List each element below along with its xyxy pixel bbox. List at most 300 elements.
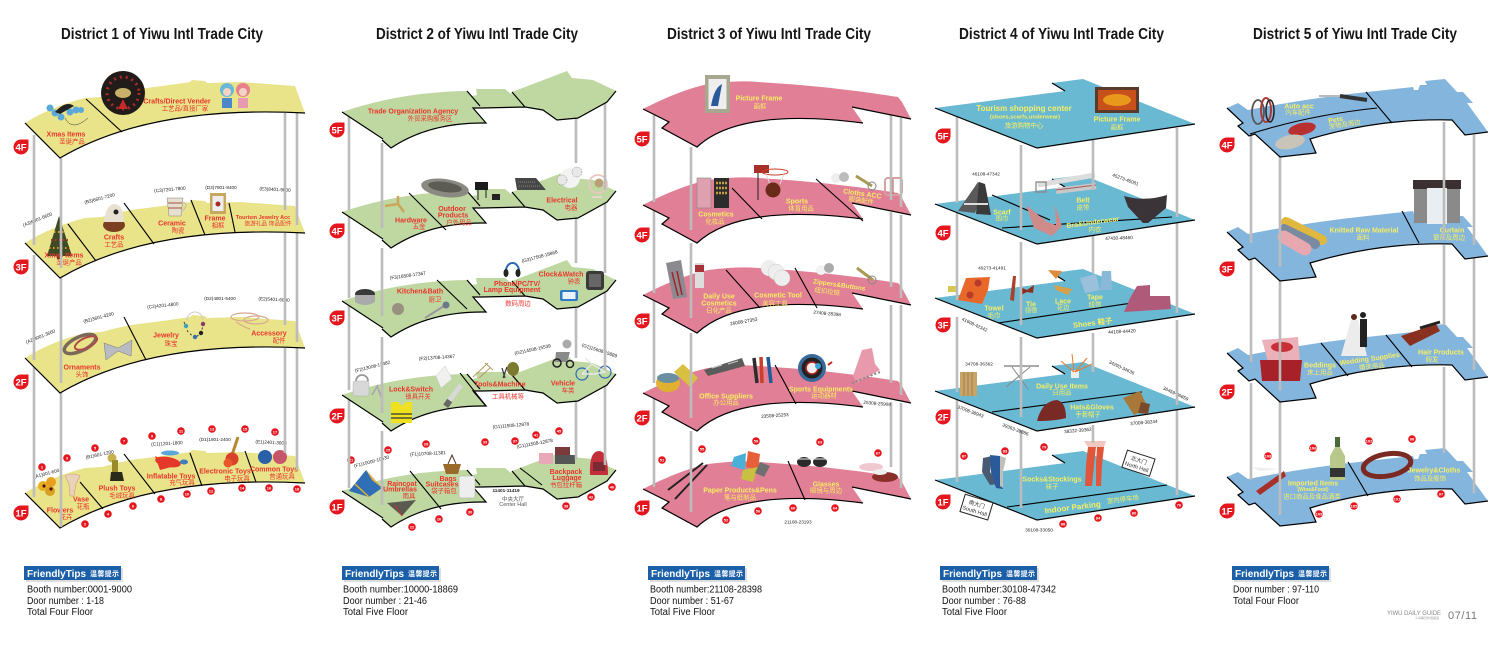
icon: colourful brushes	[1061, 354, 1092, 378]
sign: North Hall: North Hall	[1124, 461, 1149, 474]
booth numbers 3F	[390, 249, 559, 281]
friendly tips: District 1: Booth number:0001-9000	[27, 584, 132, 596]
door numbers 1-18: 1	[41, 464, 44, 470]
label: Towel: Towel	[984, 306, 1004, 312]
label: Cosmetic Tool: Cosmetic Tool	[754, 292, 802, 300]
label: Tourism shopping center: 旅游购物中心	[1005, 120, 1044, 130]
poles 2F to 1F	[349, 380, 605, 505]
label: Auto acc: 汽车配件	[1285, 108, 1311, 116]
label: Bra&Underwear: Bra&Underwear	[1066, 216, 1120, 230]
door numbers 97-108: 97	[1439, 492, 1444, 496]
poles 5F to 4F	[957, 117, 1177, 230]
icon: buttons	[816, 263, 834, 275]
icon: alarm clock	[560, 290, 578, 301]
label: Frame: 相框	[212, 220, 225, 230]
label: Vehicle: 车类	[562, 386, 575, 394]
door numbers 97-108: 102	[1366, 438, 1373, 444]
label: Picture Frame	[1094, 116, 1140, 132]
icon: socks	[982, 455, 1006, 489]
label: Electrical: Electrical	[546, 198, 578, 204]
icon: accessory	[231, 313, 268, 329]
badge 3F	[14, 260, 28, 274]
label: Beddings: Beddings	[1304, 362, 1336, 370]
friendly tips: District 1: FriendlyTips	[27, 568, 86, 580]
floor 3F	[1220, 180, 1488, 281]
label: Sports Equipments: Sports Equipments	[789, 386, 853, 394]
label: Curtain	[1433, 228, 1466, 242]
label: Raincoat Umbrellas: Umbrellas	[383, 486, 417, 494]
door numbers 51-67: 56	[756, 508, 761, 514]
sign: South Hall: 南大门	[968, 498, 986, 510]
badge 4F: 4F	[15, 142, 27, 154]
label: Picture Frame	[736, 96, 782, 110]
badge 3F	[634, 314, 650, 328]
label: Scarf: 围巾	[996, 214, 1008, 222]
icon: ornaments	[62, 330, 99, 358]
badge 3F	[330, 310, 344, 326]
footer: Yiwu Daily Guide page number	[1387, 610, 1477, 622]
badge 2F: 2F	[937, 412, 949, 424]
label: Office Suppliers: 办公用品	[713, 398, 739, 406]
label: Glasses	[810, 482, 843, 494]
label: Glasses: Glasses	[813, 482, 840, 488]
label: Center Hall: 11401-11419	[492, 488, 520, 493]
door numbers 1-18: 4	[107, 512, 110, 516]
label: Electrical: 电器	[565, 202, 578, 212]
label: Tools&Machine	[474, 382, 526, 400]
icon: suitcase	[459, 476, 475, 498]
door numbers 1-18: 5	[94, 446, 97, 450]
label: Pets: Pets	[1328, 116, 1344, 125]
label: Lace	[1055, 298, 1071, 312]
booth numbers 3F: (E3)8401-9000	[259, 186, 291, 193]
icon: xmas wreath	[101, 71, 145, 115]
label: Ceramic: Ceramic	[158, 220, 186, 228]
booth numbers 2F: 34708-36362	[965, 362, 993, 366]
label: Cosmetics	[698, 212, 734, 226]
icon: bird basket	[103, 204, 125, 232]
label: Hats&Gloves: Hats&Gloves	[1070, 404, 1114, 412]
label: Vase: Vase	[73, 496, 89, 504]
label: Crafts/Direct Vender: Crafts/Direct Vender	[143, 98, 211, 106]
door numbers 51-67: 60	[791, 506, 796, 510]
label: Xmas Items 4F	[47, 132, 86, 146]
floor 3F	[634, 260, 911, 333]
badge 1F: 1F	[15, 508, 27, 520]
friendly tips: District 1: 温馨提示	[90, 569, 119, 578]
label: Glasses: 眼镜与周边	[810, 486, 843, 494]
badge 5F	[634, 132, 650, 146]
label: Imported Items: (Wine&Food)	[1297, 487, 1329, 493]
label: Picture Frame: 画框	[1111, 122, 1124, 132]
booth numbers 2F: (C2)4201-4800	[147, 301, 179, 310]
icon: makeup palettes	[697, 178, 729, 208]
badge 2F	[14, 374, 28, 390]
door numbers 97-108: 98	[1410, 436, 1415, 442]
friendly tips: District 4: Booth number:30108-47342	[942, 584, 1056, 596]
floor 2F	[330, 340, 618, 431]
icon: piano	[475, 182, 500, 200]
friendly tips: District 3	[648, 566, 762, 618]
friendly tips: District 2: 温馨提示	[408, 569, 437, 578]
booth numbers 3F: 40273-41491	[978, 266, 1006, 270]
label: Hair Products: 假发	[1426, 354, 1439, 364]
badge 5F: 5F	[636, 134, 648, 146]
door numbers 51-67: 63	[818, 440, 823, 444]
label: Office Suppliers	[699, 394, 753, 406]
booth numbers 2F: 36459-36859	[1162, 386, 1190, 402]
friendly tips: District 4: Door number : 76-88	[942, 596, 1026, 607]
door numbers 21-46: 22	[410, 524, 415, 530]
label: Sports: Sports	[786, 198, 808, 206]
label: Bags Suitcases: 袋子箱包	[431, 486, 457, 495]
icon: faucet	[385, 196, 404, 212]
label: Tie	[1025, 302, 1038, 314]
icon: coloured paper sheets	[731, 451, 770, 482]
label: Xmas Items 4F: Xmas Items	[47, 132, 86, 138]
panel: District 4	[935, 26, 1195, 618]
label: Crafts/Direct Vender	[143, 98, 211, 112]
door numbers 1-18: 17	[273, 430, 278, 434]
label: Jewelry: Jewelry	[153, 332, 179, 340]
label: Xmas Items 3F: 圣诞产品	[56, 258, 82, 266]
label: Hats&Gloves	[1070, 404, 1114, 418]
label: Bags Suitcases	[426, 476, 458, 495]
label: Xmas Items 4F: 圣诞产品	[59, 136, 85, 146]
icon: glasses cases	[859, 463, 898, 482]
label: Jewelry	[153, 332, 179, 348]
booth numbers 3F: (B3)6601-7200	[84, 192, 116, 205]
door numbers 1-18: 3	[66, 456, 69, 460]
label: Flowers: 花卉	[60, 512, 73, 521]
panel: District 2	[330, 26, 618, 618]
booth numbers 4F: 45273-46061	[1112, 173, 1140, 187]
booth numbers 2F: (D2)4801-5400	[204, 296, 236, 301]
poles 4F to 3F	[34, 113, 297, 268]
label: Lock&Switch: Lock&Switch	[389, 386, 433, 394]
badge 2F	[634, 410, 650, 426]
poles 4F to 3F	[1251, 122, 1474, 267]
friendly tips: District 3: 温馨提示	[714, 569, 743, 578]
door numbers 97-108	[1264, 435, 1445, 518]
label: Lock&Switch: 锁具开关	[405, 392, 431, 400]
friendly tips: District 2	[342, 566, 458, 618]
badge 3F: 3F	[937, 320, 949, 332]
label: Electronic Toys: Electronic Toys	[199, 468, 251, 476]
icon: plush giraffe	[108, 454, 124, 481]
friendly tips: District 2: Door number : 21-46	[343, 596, 427, 607]
icon: pens	[668, 463, 707, 499]
icon: picture frame	[210, 193, 226, 214]
badge 2F: 2F	[331, 412, 343, 422]
poles 3F to 2F	[957, 317, 1177, 417]
badge 4F	[1220, 138, 1234, 152]
label: Bra&Underwear: 内衣	[1089, 224, 1102, 234]
footer: Yiwu Daily Guide page number: YIWU DAILY GUIDE	[1387, 611, 1441, 617]
icon: mixer console	[515, 178, 546, 190]
icon: tricycle	[553, 340, 574, 368]
booth numbers 3F	[961, 266, 1136, 335]
icon: hand tools	[473, 363, 493, 378]
badge 1F	[634, 500, 650, 516]
label: Hats&Gloves: 手套帽子	[1075, 410, 1101, 418]
floor 4F	[935, 172, 1195, 244]
floor 4F	[330, 167, 616, 248]
label: Lace: Lace	[1055, 298, 1071, 306]
badge 5F	[936, 128, 950, 144]
icon: basketball hoop	[754, 165, 788, 200]
title: District 5: District 5 of Yiwu Intl Trade City	[1253, 26, 1457, 43]
icon: machine parts	[502, 362, 519, 378]
icon: cotton pads	[761, 260, 790, 286]
icon: common toy balls	[258, 450, 287, 464]
door numbers 51-67: 64	[833, 506, 838, 510]
friendly tips: District 1	[24, 566, 132, 618]
floor 5F	[935, 79, 1195, 148]
booth numbers 3F	[22, 185, 291, 228]
booth numbers 1F: (F1)10000-10630	[353, 454, 390, 469]
icon: wooden blocks	[960, 372, 977, 396]
door numbers 21-46: 21	[349, 458, 354, 462]
icon: framed carpet picture	[1095, 87, 1139, 113]
label: Plush Toys: 毛绒玩具	[109, 490, 135, 500]
badge 4F	[14, 140, 28, 154]
poles 3F to 2F	[1251, 245, 1474, 391]
floor 4F	[14, 71, 305, 158]
label: Clock&Watch: Clock&Watch	[539, 272, 583, 278]
label: Phone/PC/TV: Phone/PC/TV/	[494, 281, 540, 288]
booth numbers 2F: (F2)13708-14367	[419, 354, 456, 361]
label: Knitted Raw Material: Knitted Raw Material	[1330, 228, 1398, 234]
label: Xmas Items 3F	[45, 252, 84, 266]
label: Socks&Stockings: Socks&Stockings	[1022, 476, 1082, 484]
badge 1F: 1F	[331, 502, 343, 514]
poles 2F to 1F	[1251, 367, 1474, 515]
poles 3F to 2F	[34, 233, 297, 383]
icon: backpack	[590, 451, 608, 475]
label: Daily Use Items	[1036, 384, 1088, 396]
label: Socks&Stockings	[1022, 476, 1082, 490]
label: Lock&Switch	[389, 386, 433, 400]
label: Lace: 花边	[1057, 302, 1070, 312]
friendly tips: District 3: Booth number:21108-28398	[650, 584, 762, 596]
panel: District 5	[1220, 26, 1488, 607]
label: Jewelry&Cloths	[1408, 468, 1460, 482]
label: Common Toys	[250, 466, 298, 480]
badge 3F: 3F	[1221, 264, 1233, 276]
label: Tools&Machine: Tools&Machine	[474, 382, 526, 388]
label: Tape: 线带	[1089, 300, 1102, 308]
footer: Yiwu Daily Guide page number: 07/11	[1448, 610, 1477, 622]
label: Indoor Parking: 室内停车场	[1106, 493, 1139, 505]
icon: chandelier	[557, 167, 582, 188]
door numbers 1-18: 12	[209, 488, 214, 494]
booth numbers 2F	[957, 360, 1190, 437]
icon: energy-saving bulb	[443, 385, 461, 408]
icon: cooking pot	[355, 289, 375, 305]
door numbers 1-18: 15	[243, 426, 248, 432]
label: Raincoat Umbrellas: Raincoat	[387, 481, 417, 488]
label: Indoor Parking	[1044, 493, 1139, 515]
icon: pocket knife	[1250, 467, 1286, 495]
floor 2F	[1220, 312, 1488, 402]
icon: safety vest	[391, 402, 412, 423]
icon: bra	[1026, 205, 1062, 236]
booth numbers 1F: 30108-33050	[1025, 528, 1053, 532]
friendly tips: District 2: FriendlyTips	[345, 568, 404, 580]
label: Imported Items	[1283, 480, 1341, 500]
friendly tips: District 2: Total Five Floor	[343, 607, 409, 618]
badge 5F	[330, 122, 344, 138]
label: Indoor Parking: Indoor Parking	[1044, 500, 1101, 515]
icon: cloth buttons	[831, 172, 849, 183]
label: Kitchen&Bath: 厨卫	[429, 296, 442, 304]
floor 1F	[1220, 435, 1488, 526]
floor 1F	[935, 441, 1195, 532]
floor 1F	[634, 437, 911, 527]
label: Crafts	[104, 234, 124, 248]
label: Jewelry: 珠宝	[165, 338, 177, 348]
label: Tie: Tie	[1026, 302, 1036, 308]
label: Paper Products&Pens: Paper Products&Pens	[703, 488, 777, 494]
floor 2F	[14, 296, 305, 393]
label: Phone/PC/TV	[484, 281, 541, 308]
label: Backpack Luggage: Backpack	[550, 469, 582, 476]
door numbers 76-88: 79	[1042, 444, 1047, 450]
label: Outdoor Products: Products	[438, 212, 468, 220]
label: Office Suppliers: Office Suppliers	[699, 394, 753, 400]
badge 1F: 1F	[636, 504, 648, 514]
icon: roller skate	[852, 348, 880, 383]
icon: wine bottle	[1330, 437, 1345, 480]
booth numbers 3F: (G3)17508-18868	[521, 249, 559, 264]
label: Crafts: Crafts	[104, 234, 124, 242]
badge 3F	[936, 318, 950, 332]
friendly tips: District 2: Booth number:10000-18869	[343, 584, 458, 596]
icon: cap	[1037, 400, 1066, 421]
label: Scarf	[993, 210, 1011, 222]
booth numbers 3F: 27408-28398	[813, 310, 841, 317]
door numbers 1-18: 13	[210, 426, 215, 432]
icon: fabric rolls	[1284, 222, 1322, 249]
badge 2F	[936, 410, 950, 424]
badge 2F: 2F	[1221, 388, 1233, 398]
booth numbers 1F	[353, 421, 554, 469]
label: Flowers: Flowers	[47, 508, 73, 514]
label: Sports Equipments	[789, 386, 853, 400]
door numbers 1-18: 16	[267, 486, 272, 490]
label: Tourism Jewelry Acc	[236, 215, 292, 228]
label: Crafts/Direct Vender: 工艺品/直接厂家	[162, 104, 209, 112]
floor 1F	[14, 425, 305, 528]
label: Daily Use Items: 日用品	[1052, 388, 1072, 396]
icon: necklace	[184, 312, 205, 339]
door numbers 97-108: 105	[1351, 504, 1358, 508]
label: Towel: 毛巾	[988, 310, 1000, 320]
icon: padlock and keys	[353, 375, 381, 397]
label: Frame	[204, 216, 226, 230]
friendly tips: District 5: Door number : 97-110	[1233, 584, 1319, 596]
label: Cosmetics: 化妆品	[705, 216, 725, 226]
door numbers 97-108: 109	[1316, 512, 1323, 516]
label: Knitted Raw Material	[1330, 228, 1398, 242]
label: Bags Suitcases: Suitcases	[426, 482, 458, 488]
door numbers 51-67	[658, 437, 882, 524]
label: Picture Frame: Picture Frame	[736, 96, 782, 102]
label: Wedding Supplies: 婚庆用品	[1359, 360, 1385, 372]
booth numbers 2F: 23508-25253	[761, 412, 789, 419]
door numbers 21-46: 37	[513, 438, 518, 444]
label: Outdoor Products: Outdoor	[438, 206, 466, 213]
door numbers 21-46: 41	[534, 432, 539, 438]
booth numbers 3F: 26008-27353	[730, 317, 758, 326]
door numbers 1-18: 9	[151, 434, 154, 438]
badge 1F: 1F	[937, 498, 949, 508]
label: Picture Frame: Picture Frame	[1094, 116, 1140, 124]
booth numbers 1F: (A1)001-600	[33, 468, 60, 479]
door numbers 21-46: 30	[468, 510, 473, 514]
icon: bicycle	[576, 358, 611, 380]
badge 1F	[14, 506, 28, 520]
door numbers 21-46: 33	[483, 440, 488, 444]
icon: handbag	[443, 455, 461, 474]
door numbers 76-88: 84	[1096, 516, 1101, 520]
icon: tent	[349, 470, 382, 497]
badge 4F	[936, 226, 950, 240]
icon: shower fittings	[392, 302, 450, 318]
label: Sports: 体育用品	[788, 204, 814, 212]
label: Curtain: 窗帘及周边	[1433, 232, 1466, 242]
booth numbers 3F: 41608-42342	[961, 317, 989, 333]
label: Plush Toys	[99, 486, 136, 500]
label: Trade Organization Agency: 外贸采购服务区	[408, 114, 453, 122]
label: Vase: 花瓶	[77, 502, 90, 510]
door numbers 21-46: 46	[610, 484, 615, 490]
icon: toy guitar	[224, 437, 238, 468]
label: Crafts: 工艺品	[104, 240, 124, 248]
badge 4F: 4F	[1221, 140, 1233, 152]
door numbers 1-18: 10	[185, 492, 190, 496]
booth numbers 1F: (D1)1801-2400	[199, 437, 231, 442]
icon: switch plate	[436, 366, 452, 388]
icon: stockings	[1084, 441, 1106, 486]
door numbers 51-67: 51	[660, 458, 665, 462]
booth numbers 2F: (E2)5401-6000	[258, 296, 290, 303]
friendly tips: District 4	[940, 566, 1056, 618]
booth numbers 2F	[354, 342, 618, 373]
icon: ceramic cup	[167, 198, 186, 216]
label: Tourism shopping center	[976, 104, 1072, 130]
door numbers 1-18: 7	[123, 438, 126, 444]
label: Hair Products: Hair Products	[1418, 350, 1464, 356]
icon: belt	[1036, 175, 1096, 192]
booth numbers 1F: (F1)10708-11381	[410, 450, 446, 457]
badge 4F: 4F	[937, 228, 949, 240]
label: Electronic Toys: 电子玩具	[224, 474, 250, 482]
icon: christmas tree	[47, 216, 72, 259]
label: Center Hall: 中央大厅	[502, 495, 524, 503]
badge 3F: 3F	[15, 262, 27, 274]
icon: pencil case	[704, 358, 745, 376]
label: Plush Toys: Plush Toys	[99, 486, 136, 492]
friendly tips: District 3: Total Five Floor	[650, 607, 716, 618]
label: Center Hall: Center Hall	[499, 502, 527, 508]
label: Tourism shopping center: (shoes,scarfs,underwear)	[990, 114, 1060, 120]
door numbers 51-67: 55	[700, 446, 705, 452]
label: Outdoor Products	[438, 206, 472, 226]
icon: towel	[948, 277, 990, 304]
icon: shoes	[1124, 285, 1171, 312]
